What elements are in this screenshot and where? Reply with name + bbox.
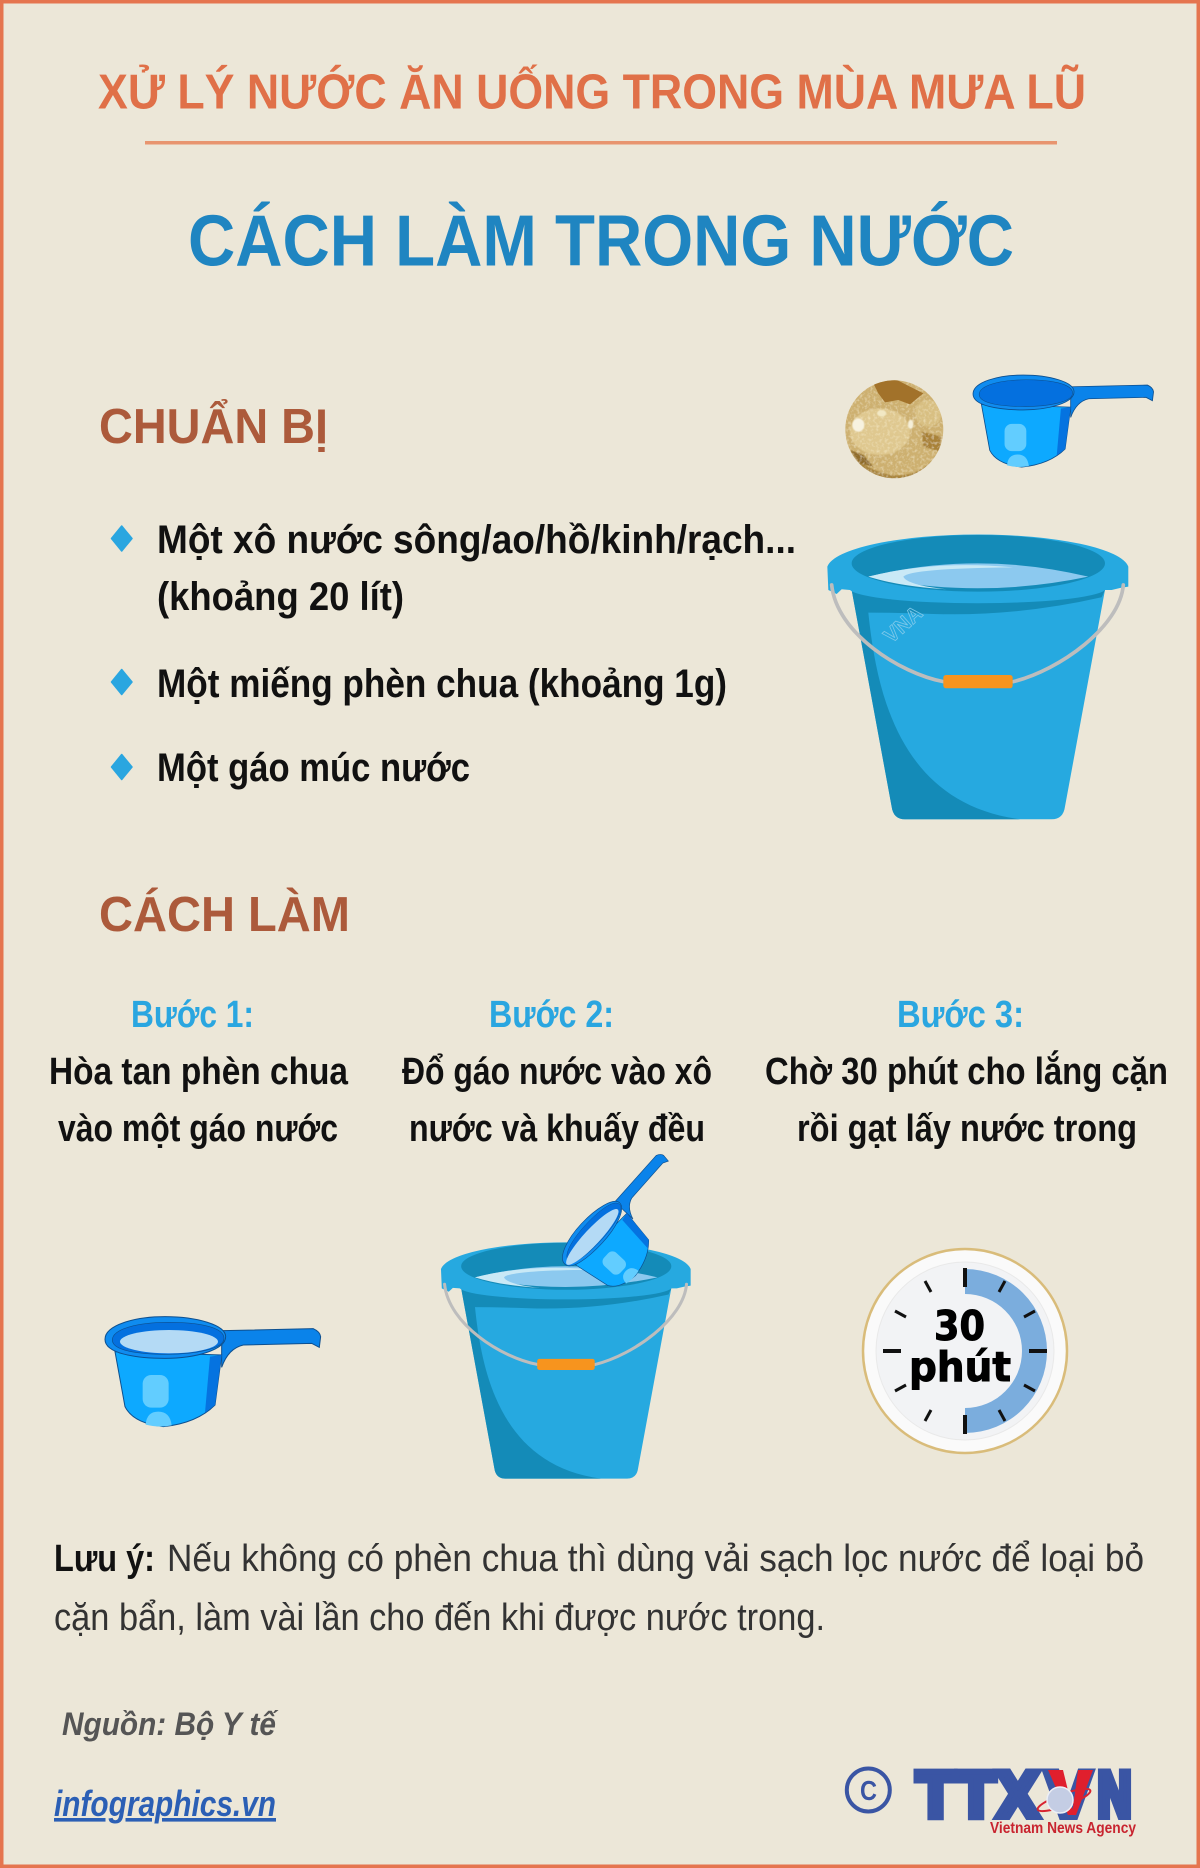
icon: alum rock bbox=[845, 380, 944, 478]
item 1: Một xô nước sông/ao/hồ/kinh/rạch... bbox=[157, 518, 796, 562]
icon: large bucket with water: VNA bbox=[879, 602, 927, 648]
logo: TTXVN: V bbox=[1045, 1759, 1092, 1832]
logo: TTXVN: C bbox=[860, 1775, 877, 1806]
section heading: chuẩn bị: CHUẨN BỊ bbox=[99, 399, 328, 454]
section heading: cách làm: CÁCH LÀM bbox=[99, 888, 350, 942]
step 2 label: Bước 2: bbox=[489, 994, 614, 1036]
step 1 text: vào một gáo nước bbox=[58, 1108, 338, 1150]
note: Lưu ý: bbox=[54, 1538, 155, 1580]
step 1 label: Bước 1: bbox=[131, 994, 254, 1036]
note: cặn bẩn, làm vài lần cho đến khi được nước trong. bbox=[54, 1597, 825, 1639]
logo: TTXVN: TTX bbox=[916, 1759, 1040, 1832]
icon: ladle tilted over bucket bbox=[554, 1146, 708, 1305]
step 2 text: Đổ gáo nước vào xô bbox=[402, 1051, 712, 1093]
icon: large bucket with water bbox=[827, 534, 1128, 819]
step 2 text bbox=[402, 1051, 712, 1150]
bullet 1 bbox=[112, 526, 132, 551]
clock label bbox=[909, 1302, 1011, 1391]
main heading: CÁCH LÀM TRONG NƯỚC bbox=[188, 200, 1014, 282]
icon: bucket with water bbox=[441, 1242, 691, 1479]
icon: ladle with water bbox=[105, 1317, 321, 1427]
icon: ladle, empty bbox=[973, 375, 1154, 467]
bullet 3 bbox=[112, 754, 132, 780]
step 3 text bbox=[765, 1049, 1168, 1150]
step 2 text: nước và khuấy đều bbox=[409, 1108, 705, 1150]
item 3: Một gáo múc nước bbox=[157, 746, 470, 790]
clock label: 30 bbox=[934, 1302, 985, 1350]
step 3 label: Bước 3: bbox=[897, 994, 1024, 1036]
note: Nếu không có phèn chua thì dùng vải sạch lọc nước để loại bỏ bbox=[167, 1538, 1144, 1580]
preparation list bbox=[112, 518, 796, 790]
item 1 bbox=[157, 518, 796, 619]
step 1 text: Hòa tan phèn chua bbox=[49, 1051, 349, 1093]
logo: TTXVN: Vietnam News Agency bbox=[990, 1820, 1136, 1837]
source: Nguồn: Bộ Y tế bbox=[62, 1706, 279, 1742]
item 2: Một miếng phèn chua (khoảng 1g) bbox=[157, 662, 727, 706]
website link: infographics.vn bbox=[54, 1783, 276, 1824]
step 1 bbox=[49, 994, 349, 1150]
note bbox=[54, 1538, 1144, 1639]
bullet 2 bbox=[112, 670, 132, 694]
icon: 30 minute clock bbox=[863, 1249, 1067, 1453]
step 2 bbox=[402, 994, 712, 1150]
title: XỬ LÝ NƯỚC ĂN UỐNG TRONG MÙA MƯA LŨ bbox=[98, 64, 1086, 120]
step 3 text: rồi gạt lấy nước trong bbox=[797, 1108, 1137, 1150]
step 1 text bbox=[49, 1051, 349, 1150]
step 3 bbox=[765, 994, 1168, 1150]
item 1: (khoảng 20 lít) bbox=[157, 575, 404, 619]
clock label: phút bbox=[909, 1343, 1011, 1391]
logo: TTXVN bbox=[847, 1759, 1136, 1837]
logo: TTXVN: N bbox=[1096, 1759, 1133, 1832]
